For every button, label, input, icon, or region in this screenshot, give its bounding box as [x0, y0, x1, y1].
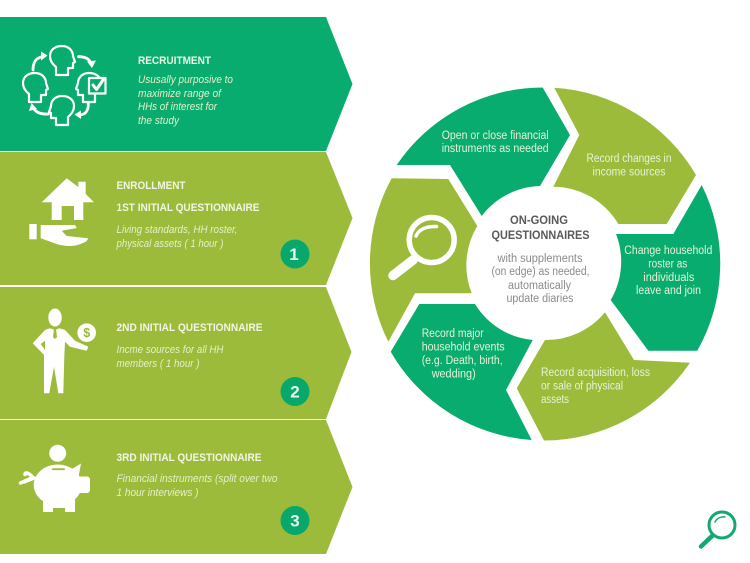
segment: household events: Record major	[422, 328, 484, 340]
segment: income sources	[553, 88, 696, 224]
text: recruitment description: the study	[138, 115, 180, 127]
heading: second initial questionnaire: 2ND INITIAL QUESTIONNAIRE	[116, 322, 262, 334]
panel: third questionnaire	[0, 420, 352, 554]
badge: number 2	[280, 377, 310, 406]
heading: first initial questionnaire: 1ST INITIAL QUESTIONNAIRE	[116, 202, 260, 214]
text: recruitment description: HHs of interest for	[138, 101, 218, 113]
text: recruitment description	[138, 74, 233, 127]
text: third questionnaire description: 1 hour interviews )	[116, 487, 199, 499]
icon: person holding coin	[33, 308, 96, 393]
center text: on-going questionnaires: automatically	[508, 280, 571, 292]
text: second questionnaire description	[116, 344, 224, 370]
segment: financial instruments: instruments as needed	[442, 143, 549, 155]
badge: number 3: 3	[290, 512, 300, 530]
badge: number 1	[280, 240, 310, 268]
icon: small magnifying glass	[701, 512, 735, 546]
segment: physical assets: assets	[541, 394, 569, 406]
segment: household roster	[611, 185, 720, 351]
heading: third initial questionnaire: 3RD INITIAL QUESTIONNAIRE	[116, 452, 262, 464]
icon: piggy bank and coin	[20, 445, 90, 512]
text: third questionnaire description: Financial instruments (split over two	[116, 473, 278, 485]
segment: household events: (e.g. Death, birth,	[422, 355, 503, 367]
segment: household roster: Change household	[624, 245, 712, 257]
center text: on-going questionnaires: (on edge) as needed,	[492, 266, 590, 278]
segment: physical assets: Record acquisition, loss	[541, 367, 650, 379]
chart: on-going questionnaire cycle	[370, 88, 720, 440]
segment: household events: wedding)	[431, 369, 476, 381]
segment: income sources: income sources	[592, 167, 666, 179]
text: first questionnaire description	[116, 224, 238, 250]
center text: on-going questionnaires: ON-GOING	[510, 213, 568, 227]
panel: recruitment	[0, 17, 352, 151]
badge: number 1: 1	[289, 245, 299, 264]
segment: financial instruments: Open or close financial	[442, 130, 549, 142]
center text: on-going questionnaires: update diaries	[506, 293, 574, 305]
center text: on-going questionnaires	[492, 213, 590, 305]
center text: on-going questionnaires: with supplements	[497, 253, 583, 265]
icon: person holding coin: $	[83, 326, 90, 340]
text: recruitment description: Ususally purposive to	[138, 74, 233, 86]
panel: enrollment, first questionnaire	[0, 152, 352, 285]
text: second questionnaire description: Incme sources for all HH	[116, 344, 224, 356]
icon: magnifying glass	[393, 218, 454, 276]
segment: magnifier	[370, 178, 477, 342]
icon: house on hand	[29, 178, 94, 246]
segment: household roster: individuals	[643, 272, 695, 284]
panel: second questionnaire	[0, 287, 352, 419]
badge: number 2: 2	[290, 382, 300, 402]
segment: income sources: Record changes in	[586, 153, 672, 165]
text: third questionnaire description	[116, 473, 278, 499]
segment: household events	[391, 304, 533, 440]
icon: recruitment heads cycle	[23, 46, 106, 125]
segment: physical assets	[517, 312, 690, 440]
center text: on-going questionnaires: QUESTIONNAIRES	[492, 228, 590, 242]
heading: recruitment: RECRUITMENT	[138, 55, 211, 67]
segment: household roster: roster as	[648, 259, 688, 271]
segment: household events: household events	[422, 342, 505, 354]
text: second questionnaire description: members ( 1 hour )	[116, 358, 200, 370]
heading: enrollment: ENROLLMENT	[116, 180, 186, 192]
segment: household roster: leave and join	[636, 285, 701, 297]
text: first questionnaire description: Living standards, HH roster,	[116, 224, 238, 236]
segment: physical assets: or sale of physical	[541, 381, 623, 393]
segment: financial instruments	[397, 88, 570, 216]
badge: number 3	[280, 506, 310, 535]
text: recruitment description: maximize range of	[138, 88, 222, 100]
text: first questionnaire description: physical assets ( 1 hour )	[116, 238, 224, 250]
